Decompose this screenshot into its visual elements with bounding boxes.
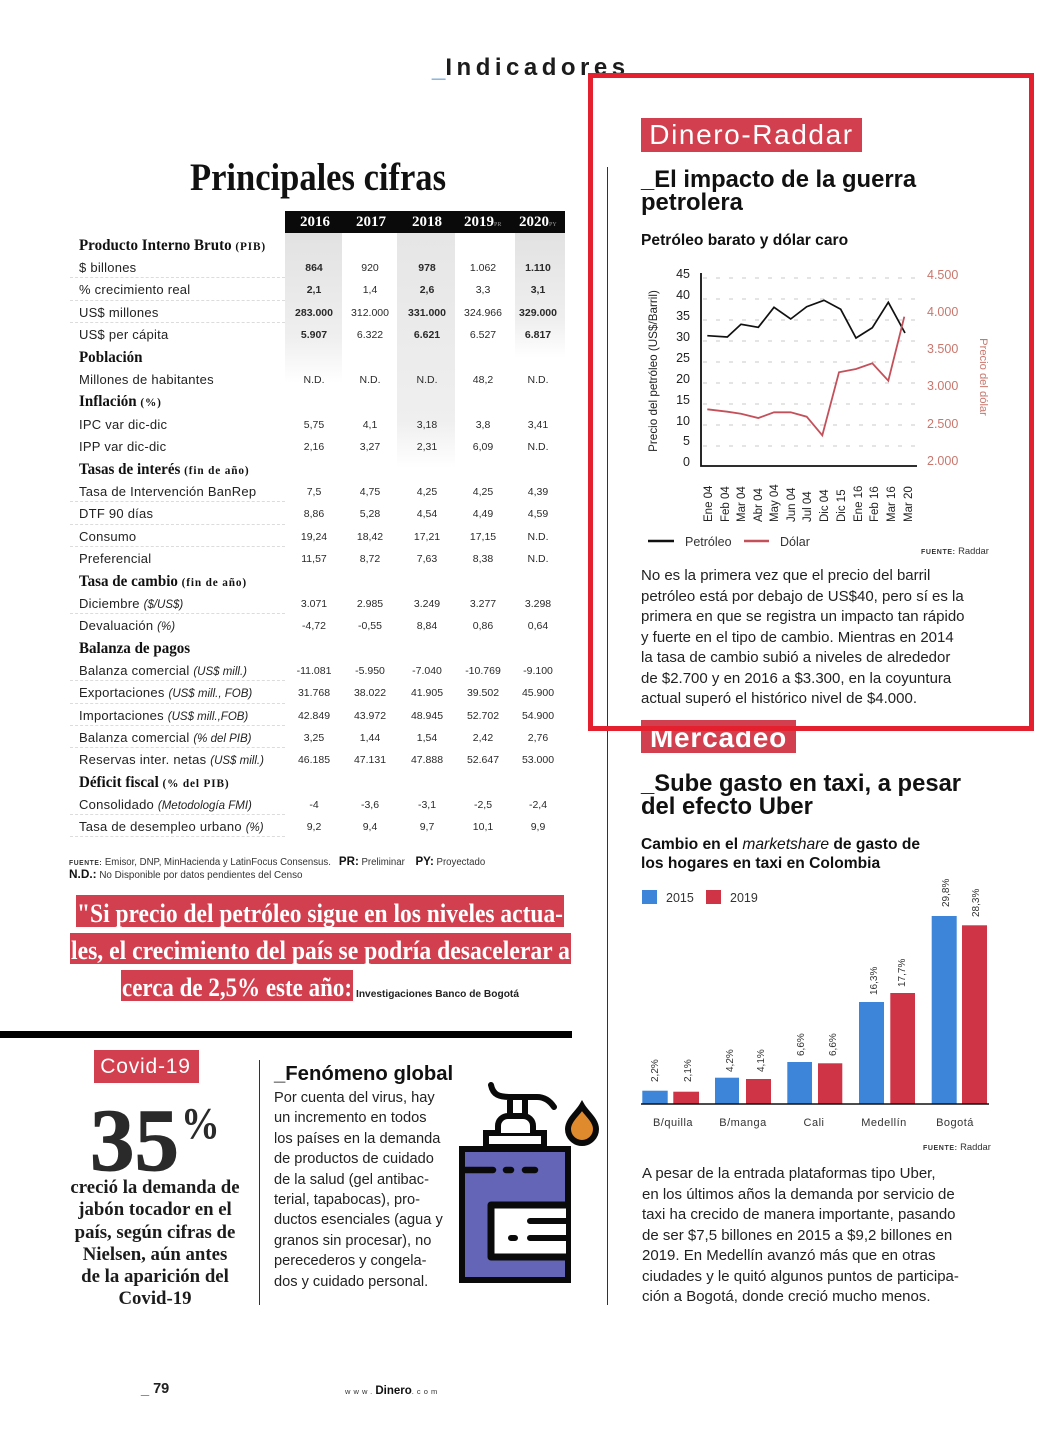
bar chart: taxi marketshare: 28,3%: [971, 889, 982, 917]
subheading: marketshare: Cambio en el marketshare de gasto de: [641, 836, 920, 853]
bar chart: taxi marketshare: Cali: [804, 1117, 824, 1129]
row: balanza comercial: -5.950: [355, 665, 385, 677]
row: preferencial: [79, 551, 548, 566]
row: per capita: [79, 327, 551, 342]
stat description: Covid-19: [118, 1288, 192, 1309]
text: fenomeno global: perecederos y congela-: [274, 1253, 427, 1269]
line chart: petroleo y dolar: Feb 04: [720, 486, 732, 522]
text: fenomeno global: ductos esenciales (agua y: [274, 1212, 443, 1228]
row: diciembre: Diciembre ($/US$): [79, 596, 183, 611]
bar chart: taxi marketshare: 2,2%: [650, 1059, 661, 1082]
line chart: petroleo y dolar: Dic 04: [819, 489, 831, 522]
row: crecimiento real: [79, 282, 546, 297]
bar chart: taxi marketshare: FUENTE: Raddar: [923, 1141, 991, 1152]
row: IPP: 2,16: [304, 441, 324, 453]
row: DTF: DTF 90 días: [79, 506, 153, 521]
row: US$ millones: 283.000: [295, 307, 333, 319]
row: crecimiento real: 2,6: [420, 284, 434, 296]
stat description: país, según cifras de: [75, 1222, 235, 1243]
heading: impacto guerra petrolera: [640, 166, 916, 216]
heading: impacto guerra petrolera: _El impacto de la guerra: [641, 166, 916, 193]
row: IPC: 3,8: [476, 419, 490, 431]
stat description: [70, 1177, 240, 1309]
row: consolidado: -2,5: [474, 799, 492, 811]
row: desempleo: 9,4: [363, 821, 377, 833]
line chart: petroleo y dolar: 15: [676, 393, 690, 407]
line chart: petroleo y dolar: Precio del petróleo (US$/Barril): [647, 290, 660, 452]
line chart: petroleo y dolar: 0: [683, 455, 690, 469]
line chart: petroleo y dolar: 3.000: [927, 379, 958, 393]
row: DTF: 4,59: [528, 508, 548, 520]
bar chart: taxi marketshare: Medellín: [861, 1117, 907, 1129]
row: billones: 1.110: [525, 262, 551, 274]
row heading: tasas de interes: Tasas de interés (fin de año): [79, 461, 249, 478]
row: DTF: [79, 506, 548, 521]
row: US$ millones: US$ millones: [79, 305, 159, 320]
text: fenomeno global: de la salud (gel antibac-: [274, 1172, 429, 1188]
row: importaciones: 54.900: [522, 710, 554, 722]
row: habitantes: Millones de habitantes: [79, 372, 214, 387]
row: consolidado: [79, 797, 547, 812]
line chart: petroleo y dolar: Ene 04: [703, 485, 715, 522]
row: devaluacion: [79, 618, 548, 633]
table header years: 2018: [412, 214, 442, 230]
heading: impacto guerra petrolera: petrolera: [641, 188, 743, 216]
row: reservas: 47.131: [354, 754, 386, 766]
bar chart: taxi marketshare: 2015: [666, 891, 694, 905]
badge: Covid-19: [94, 1050, 199, 1083]
row: billones: $ billones: [79, 260, 136, 275]
row: habitantes: N.D.: [304, 374, 324, 386]
heading: gasto en taxi: [640, 770, 961, 820]
row: habitantes: N.D.: [528, 374, 548, 386]
row: reservas: 47.888: [411, 754, 443, 766]
row: billones: [79, 260, 551, 275]
row: consolidado: -3,1: [418, 799, 436, 811]
row: per capita: 5.907: [301, 329, 327, 341]
row: reservas: 53.000: [522, 754, 554, 766]
row: importaciones: 52.702: [467, 710, 499, 722]
row: desempleo: 9,2: [307, 821, 321, 833]
stat description: de la aparición del: [81, 1266, 229, 1287]
row: preferencial: Preferencial: [79, 551, 151, 566]
row: exportaciones: 41.905: [411, 687, 443, 699]
row: importaciones: 48.945: [411, 710, 443, 722]
row: reservas: [79, 752, 554, 767]
line chart: petroleo y dolar: 4.000: [927, 305, 958, 319]
line chart: petroleo y dolar: Ene 16: [853, 486, 865, 522]
bar chart: taxi marketshare: 2019: [730, 891, 758, 905]
row: consumo: Consumo: [79, 529, 136, 544]
row: desempleo: 9,9: [531, 821, 545, 833]
line chart: petroleo y dolar: 4.500: [927, 268, 958, 282]
line chart: petroleo y dolar: Abr 04: [753, 488, 765, 522]
table header years: 2020PY: [519, 214, 557, 230]
line chart: petroleo y dolar: Dólar: [780, 535, 810, 549]
row: balanza comercial: -10.769: [465, 665, 501, 677]
line chart: petroleo y dolar: 5: [683, 434, 690, 448]
line chart: petroleo y dolar: 35: [676, 309, 690, 323]
text: fenomeno global: [274, 1090, 443, 1290]
row: consumo: N.D.: [528, 531, 548, 543]
page number: _ 79: [141, 1381, 169, 1397]
text: impacto petroleo: primera en que se registra un impacto tan rápido: [641, 608, 965, 625]
text: taxi: A pesar de la entrada plataformas tipo Uber,: [642, 1165, 936, 1182]
row: US$ millones: 324.966: [464, 307, 502, 319]
panel: economic indicators table: [285, 233, 565, 444]
line chart: petroleo y dolar: Jul 04: [802, 491, 814, 522]
bar chart: taxi marketshare: 6,6%: [796, 1033, 807, 1056]
row: reservas: 52.647: [467, 754, 499, 766]
row: exportaciones: 31.768: [298, 687, 330, 699]
row: DTF: 4,49: [473, 508, 493, 520]
stat description: jabón tocador en el: [78, 1199, 232, 1220]
row: preferencial: 8,72: [360, 553, 380, 565]
text: fenomeno global: un incremento en todos: [274, 1110, 427, 1126]
row: importaciones: [79, 708, 554, 723]
badge: Dinero-Raddar: Dinero-Raddar: [649, 119, 854, 150]
row heading: deficit fiscal: Déficit fiscal (% del PIB): [79, 774, 229, 791]
row: tasa de intervencion: Tasa de Intervención BanRep: [79, 484, 256, 499]
row: importaciones: Importaciones (US$ mill.,FOB): [79, 708, 248, 723]
table header years: 2017: [356, 214, 386, 230]
row: diciembre: [79, 596, 551, 611]
row: tasa de intervencion: 4,25: [473, 486, 493, 498]
row heading: balanza de pagos: Balanza de pagos: [79, 640, 190, 657]
row: IPP: [79, 439, 548, 454]
row: billones: 978: [418, 262, 436, 274]
stat: 35%: [90, 1092, 220, 1190]
line chart: petroleo y dolar: [647, 267, 989, 556]
text: fenomeno global: terial, tapabocas), pro-: [274, 1192, 420, 1208]
row: consumo: 17,15: [470, 531, 496, 543]
line chart: petroleo y dolar: 20: [676, 372, 690, 386]
line chart: petroleo y dolar: 45: [676, 267, 690, 281]
row: balanza comercial: -11.081: [297, 665, 331, 677]
row: consolidado: Consolidado (Metodología FMI): [79, 797, 252, 812]
row: devaluacion: Devaluación (%): [79, 618, 175, 633]
row: preferencial: 8,38: [473, 553, 493, 565]
row: IPC: 3,41: [528, 419, 548, 431]
subheading: petroleo barato: Petróleo barato y dólar caro: [641, 232, 848, 249]
text: taxi: ción a Bogotá, donde creció mucho menos.: [642, 1288, 931, 1305]
row: importaciones: 42.849: [298, 710, 330, 722]
row: crecimiento real: 3,1: [531, 284, 545, 296]
row: tasa de intervencion: 7,5: [307, 486, 321, 498]
row: consumo: 17,21: [414, 531, 440, 543]
subheading: marketshare: [641, 836, 920, 872]
row: diciembre: 2.985: [357, 598, 383, 610]
row heading: inflacion: Inflación (%): [79, 393, 162, 410]
row: balanza comercial PIB: Balanza comercial (% del PIB): [79, 730, 252, 745]
text: impacto petroleo: de $2.700 y en 2016 a $3.300, en la coyuntura: [641, 670, 951, 686]
row: diciembre: 3.071: [301, 598, 327, 610]
row: devaluacion: 0,64: [528, 620, 548, 632]
row: consolidado: -3,6: [361, 799, 379, 811]
text: fenomeno global: granos sin procesar), no: [274, 1233, 431, 1249]
row: billones: 864: [305, 262, 323, 274]
text: impacto petroleo: petróleo está por debajo de US$40, pero sí es la: [641, 588, 964, 604]
text: fenomeno global: Por cuenta del virus, hay: [274, 1090, 435, 1106]
row: IPP: 2,31: [417, 441, 437, 453]
row: balanza comercial PIB: 2,42: [473, 732, 493, 744]
text: taxi: de ser $7,5 billones en 2015 a $9,2 billones en: [642, 1226, 952, 1244]
line chart: petroleo y dolar: Feb 16: [869, 486, 881, 522]
bar chart: taxi marketshare: B/manga: [719, 1117, 767, 1129]
row: per capita: US$ per cápita: [79, 327, 168, 342]
icon: soap dispenser: [459, 1082, 599, 1283]
row: crecimiento real: 3,3: [476, 284, 490, 296]
row: devaluacion: -0,55: [358, 620, 382, 632]
text: fenomeno global: los países en la demanda: [274, 1131, 440, 1147]
text: impacto petroleo: [641, 567, 965, 707]
line chart: petroleo y dolar: 2.000: [927, 454, 958, 468]
quote callout: [70, 895, 571, 1002]
row: devaluacion: 8,84: [417, 620, 437, 632]
row: balanza comercial: [79, 663, 553, 678]
line chart: petroleo y dolar: 30: [676, 330, 690, 344]
row: habitantes: N.D.: [416, 374, 438, 386]
table source note: N.D.: No Disponible por datos pendientes del Censo: [69, 867, 302, 881]
row: desempleo: 9,7: [420, 821, 434, 833]
row: US$ millones: 329.000: [519, 307, 557, 319]
row: desempleo: 10,1: [473, 821, 493, 833]
row: IPC: [79, 417, 548, 432]
highlight frame: [588, 73, 1034, 731]
bar chart: taxi marketshare: 17,7%: [897, 959, 908, 987]
row: diciembre: 3.277: [470, 598, 496, 610]
row: tasa de intervencion: 4,75: [360, 486, 380, 498]
text: taxi: taxi ha crecido de manera importante, pasando: [642, 1206, 956, 1223]
row: US$ millones: 312.000: [351, 307, 389, 319]
row: consolidado: -2,4: [529, 799, 547, 811]
text: impacto petroleo: y fuerte en el tipo de cambio. Mientras en 2014: [641, 628, 954, 646]
text: impacto petroleo: actual superó el histórico nivel de $4.000.: [641, 690, 917, 707]
row: devaluacion: 0,86: [473, 620, 493, 632]
row: crecimiento real: 2,1: [307, 284, 321, 296]
text: impacto petroleo: No es la primera vez que el precio del barril: [641, 567, 930, 584]
row: reservas: Reservas inter. netas (US$ mill.): [79, 752, 264, 767]
row: consumo: [79, 529, 548, 544]
bar chart: taxi marketshare: 6,6%: [828, 1033, 839, 1056]
row: diciembre: 3.249: [414, 598, 440, 610]
stat description: creció la demanda de: [70, 1177, 240, 1198]
row: US$ millones: 331.000: [408, 307, 446, 319]
row: IPC: 3,18: [417, 419, 437, 431]
stat: 35%: 35: [90, 1092, 179, 1190]
row: IPC: 5,75: [304, 419, 324, 431]
line chart: petroleo y dolar: Petróleo: [685, 535, 732, 549]
row: habitantes: [79, 372, 548, 387]
text: fenomeno global: de productos de cuidado: [274, 1151, 434, 1167]
row: per capita: 6.527: [470, 329, 496, 341]
row: IPP: N.D.: [528, 441, 548, 453]
row: US$ millones: [79, 305, 557, 320]
row: balanza comercial PIB: 3,25: [304, 732, 324, 744]
row: balanza comercial: -9.100: [523, 665, 553, 677]
row: preferencial: 11,57: [301, 553, 327, 565]
row: DTF: 5,28: [360, 508, 380, 520]
row: desempleo: Tasa de desempleo urbano (%): [79, 819, 264, 834]
row: consolidado: -4: [309, 799, 319, 811]
bar chart: taxi marketshare: 4,1%: [756, 1049, 767, 1072]
row: consumo: 19,24: [301, 531, 327, 543]
row: balanza comercial PIB: 1,44: [360, 732, 380, 744]
row: exportaciones: 39.502: [467, 687, 499, 699]
row: per capita: 6.621: [414, 329, 440, 341]
page section title: _Indicadores: [432, 54, 630, 81]
row: balanza comercial PIB: [79, 730, 548, 745]
heading: gasto en taxi: _Sube gasto en taxi, a pesar: [641, 770, 961, 797]
heading: fenomeno global: _Fenómeno global: [274, 1063, 453, 1085]
subheading: marketshare: los hogares en taxi en Colombia: [641, 855, 880, 872]
row: per capita: 6.322: [357, 329, 383, 341]
line chart: petroleo y dolar: Precio del dólar: [977, 338, 989, 416]
row: per capita: 6.817: [525, 329, 551, 341]
bar chart: taxi marketshare: 2,1%: [683, 1059, 694, 1082]
row: crecimiento real: % crecimiento real: [79, 282, 190, 297]
table source note: [69, 854, 485, 881]
line chart: petroleo y dolar: 2.500: [927, 417, 958, 431]
row: balanza comercial PIB: 2,76: [528, 732, 548, 744]
line chart: petroleo y dolar: FUENTE: Raddar: [921, 545, 989, 556]
row: exportaciones: Exportaciones (US$ mill., FOB): [79, 685, 252, 700]
stat description: Nielsen, aún antes: [83, 1244, 227, 1265]
line chart: petroleo y dolar: Dic 15: [836, 489, 848, 522]
row: importaciones: 43.972: [354, 710, 386, 722]
line chart: petroleo y dolar: Mar 16: [886, 486, 898, 522]
row: balanza comercial PIB: 1,54: [417, 732, 437, 744]
row: reservas: 46.185: [298, 754, 330, 766]
text: taxi: ciudades y le quitó algunos puntos de participa-: [642, 1268, 959, 1284]
row: preferencial: 7,63: [417, 553, 437, 565]
row: IPC: IPC var dic-dic: [79, 417, 167, 432]
row: diciembre: 3.298: [525, 598, 551, 610]
row: IPP: IPP var dic-dic: [79, 439, 166, 454]
bar chart: taxi marketshare: Bogotá: [936, 1117, 974, 1129]
row: preferencial: N.D.: [528, 553, 548, 565]
bar chart: taxi marketshare: 4,2%: [725, 1049, 736, 1072]
table header years: 2016: [300, 214, 330, 230]
text: fenomeno global: dos y cuidado personal.: [274, 1274, 428, 1290]
row: exportaciones: 38.022: [354, 687, 386, 699]
row: DTF: 4,54: [417, 508, 437, 520]
bar chart: taxi marketshare: [641, 879, 991, 1152]
line chart: petroleo y dolar: May 04: [769, 484, 781, 522]
stat: 35%: %: [181, 1099, 220, 1148]
row: balanza comercial: Balanza comercial (US$ mill.): [79, 663, 247, 678]
row heading: poblacion: Población: [79, 349, 143, 366]
row: billones: 920: [361, 262, 379, 274]
text: impacto petroleo: la tasa de cambio subió a niveles de alrededor: [641, 649, 950, 666]
badge: Mercadeo: Mercadeo: [650, 722, 787, 753]
row: tasa de intervencion: [79, 484, 548, 499]
row: crecimiento real: 1,4: [363, 284, 377, 296]
bar chart: taxi marketshare: 29,8%: [941, 879, 952, 907]
footer url: www.Dinero.com: [345, 1385, 440, 1397]
row: tasa de intervencion: 4,39: [528, 486, 548, 498]
text: taxi: 2019. En Medellín avanzó más que en otras: [642, 1247, 936, 1264]
line chart: petroleo y dolar: 25: [676, 351, 690, 365]
table header years: 2019PR: [464, 214, 501, 230]
quote callout: Investigaciones Banco de Bogotá: [356, 988, 519, 1000]
row: exportaciones: 45.900: [522, 687, 554, 699]
row heading: tasa de cambio: Tasa de cambio (fin de año): [79, 573, 247, 590]
row: IPC: 4,1: [363, 419, 377, 431]
badge: Covid-19: Covid-19: [100, 1055, 191, 1078]
row: tasa de intervencion: 4,25: [417, 486, 437, 498]
row: desempleo: [79, 819, 545, 834]
heading: gasto en taxi: del efecto Uber: [641, 792, 813, 820]
row heading: PIB: Producto Interno Bruto (PIB): [79, 237, 266, 254]
row: billones: 1.062: [470, 262, 496, 274]
row: IPP: 3,27: [360, 441, 380, 453]
line chart: petroleo y dolar: Mar 20: [903, 486, 915, 522]
line chart: petroleo y dolar: 10: [676, 414, 690, 428]
line chart: petroleo y dolar: 3.500: [927, 342, 958, 356]
row: consumo: 18,42: [357, 531, 383, 543]
text: taxi: en los últimos años la demanda por servicio de: [642, 1186, 955, 1202]
row: habitantes: N.D.: [360, 374, 380, 386]
line chart: petroleo y dolar: Mar 04: [736, 486, 748, 522]
table source note: FUENTE: Emisor, DNP, MinHacienda y LatinFocus Consensus. PR: Preliminar PY: Proyectado: [69, 854, 485, 868]
row: devaluacion: -4,72: [302, 620, 326, 632]
line chart: petroleo y dolar: Jun 04: [786, 487, 798, 522]
row: DTF: 8,86: [304, 508, 324, 520]
line chart: petroleo y dolar: 40: [676, 288, 690, 302]
text: taxi: [642, 1164, 972, 1308]
bar chart: taxi marketshare: 16,3%: [869, 967, 880, 995]
bar chart: taxi marketshare: B/quilla: [653, 1117, 693, 1129]
row: exportaciones: [79, 685, 554, 700]
row: habitantes: 48,2: [473, 374, 493, 386]
row: balanza comercial: -7.040: [412, 665, 442, 677]
quote callout: cerca de 2,5% este año:: [122, 973, 352, 1002]
row: IPP: 6,09: [473, 441, 493, 453]
table header years: [285, 211, 565, 233]
